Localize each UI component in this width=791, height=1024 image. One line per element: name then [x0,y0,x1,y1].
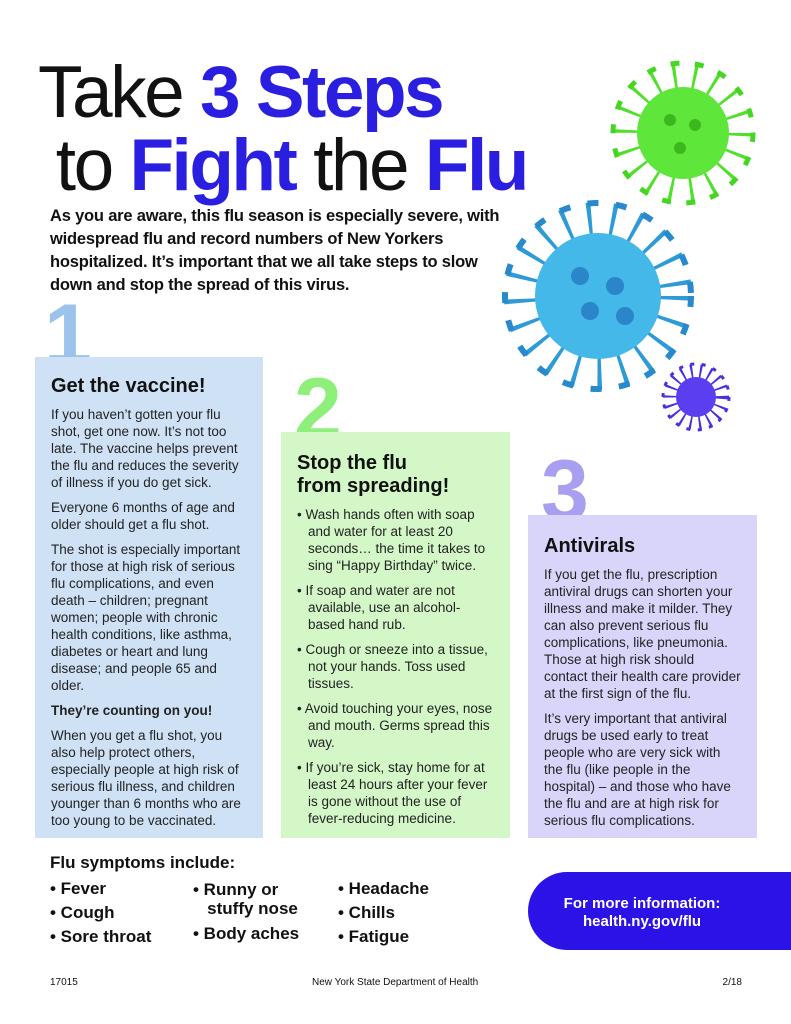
footer [50,977,742,988]
callout: more info [528,872,791,950]
panel: stop the flu: • Wash hands often with soap and water for at least 20 seconds… the time it takes to sing “Happy Birthday” twice. [297,507,485,573]
callout: more info: health.ny.gov/flu [583,913,701,930]
callout: more info: For more information: [564,895,720,912]
number 1: 1 [44,287,92,383]
icon: virus illustrations [502,60,756,432]
symptoms heading: Flu symptoms include: [50,853,235,872]
intro text: As you are aware, this flu season is especially severe, with widespread flu and record numbers of New Yorkers hospitalized. It’s important that we all take steps to slow down and stop the spread of this virus. [50,207,499,294]
footer: 17015 [50,977,78,988]
panel: antivirals: Antivirals [544,535,635,557]
symptoms list: • Runny or [193,880,278,899]
panel: antivirals [528,515,757,838]
panel: stop the flu [281,432,510,838]
panel: stop the flu: • If soap and water are not available, use an alcohol-based hand rub. [297,583,460,632]
symptoms list: • Body aches [193,924,299,943]
panel: antivirals: It’s very important that antiviral drugs be used early to treat people who are very sick with the flu (like people in the hospital) – and those who have the flu and are at high risk for serious flu complications. [544,711,731,828]
footer: New York State Department of Health [312,977,478,988]
footer: 2/18 [723,977,742,988]
panel: get the vaccine: If you haven’t gotten your flu shot, get one now. It’s not too late. The vaccine helps prevent the flu and reduces the severity of illness if you do get sick. [51,407,239,490]
panel: get the vaccine: The shot is especially important for those at high risk of serious flu complications, and even death – children; pregnant women; people with chronic health conditions, like asthma, diabetes or heart and lung disease; and people 65 and older. [51,542,240,693]
symptoms list: • Sore throat [50,927,151,946]
symptoms list: stuffy nose [207,899,298,918]
panel: get the vaccine: Get the vaccine! [51,375,206,397]
symptoms list: • Fever [50,879,106,898]
symptoms list: • Chills [338,903,395,922]
panel: stop the flu: • If you’re sick, stay home for at least 24 hours after your fever is gone without the use of fever-reducing medicine. [297,760,487,826]
symptoms list: • Cough [50,903,114,922]
symptoms list: • Fatigue [338,927,409,946]
panel: antivirals: If you get the flu, prescription antiviral drugs can shorten your illness and make it milder. They can also prevent serious flu complications, like pneumonia. Those at high risk should contact their health care provider at the first sign of the flu. [544,567,741,701]
symptoms list: • Headache [338,879,429,898]
title [38,52,527,206]
panel: stop the flu: from spreading! [297,475,449,497]
panel: get the vaccine: When you get a flu shot, you also help protect others, especially people at high risk of serious flu illness, and children younger than 6 months who are too young to be vaccinated. [51,728,241,828]
title: Take 3 Steps [38,52,442,133]
number 2: 2 [294,361,342,457]
panel: stop the flu: • Avoid touching your eyes, nose and mouth. Germs spread this way. [297,701,492,750]
symptoms list [50,879,429,946]
title: to Fight the Flu [56,125,527,206]
panel: get the vaccine: They’re counting on you! [51,703,212,718]
panel: get the vaccine: Everyone 6 months of age and older should get a flu shot. [51,500,235,532]
number 3: 3 [541,443,589,539]
panel: stop the flu: • Cough or sneeze into a tissue, not your hands. Toss used tissues. [297,642,488,691]
panel: get the vaccine [35,357,263,838]
panel: stop the flu: Stop the flu [297,452,407,474]
